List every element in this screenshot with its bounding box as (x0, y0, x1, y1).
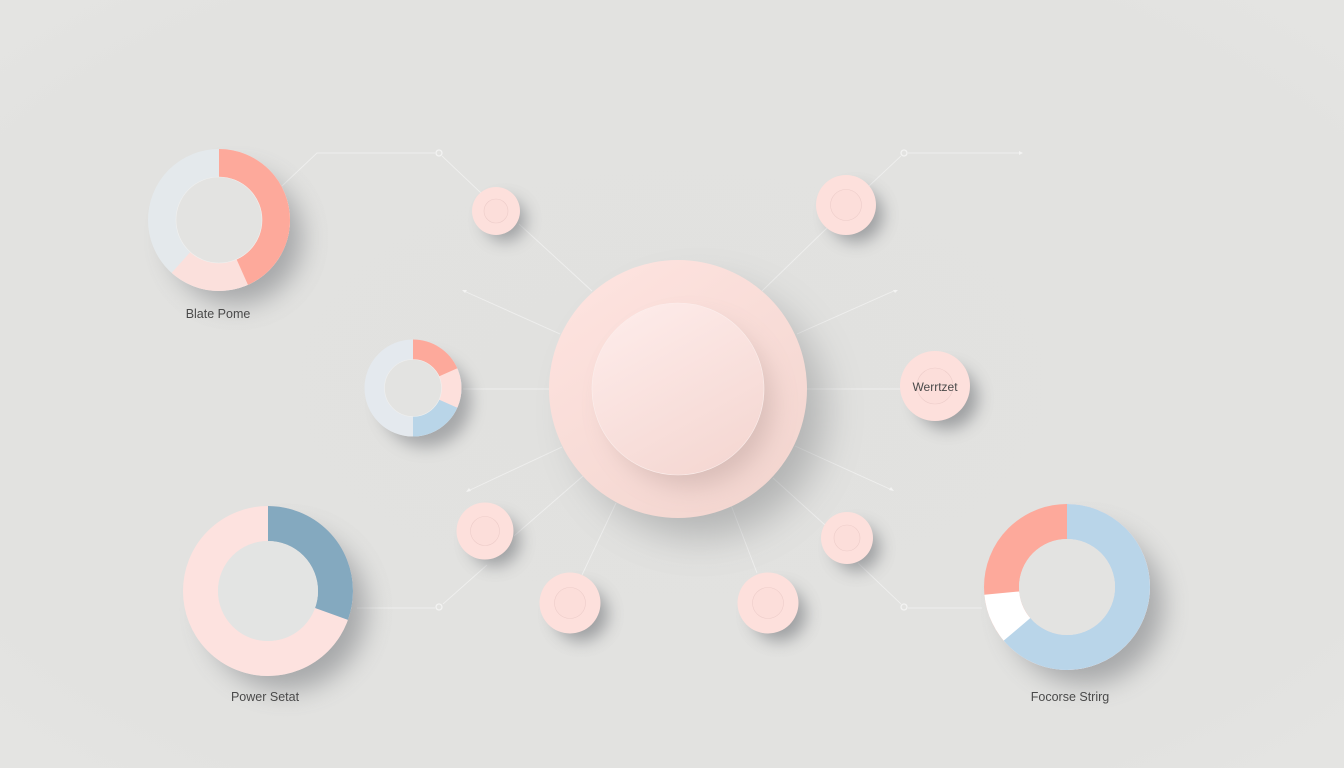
node: upper right (816, 175, 883, 242)
central hub (549, 260, 824, 536)
node: bottom left (540, 572, 608, 641)
node: lower left (456, 502, 520, 566)
connector lines (282, 150, 1023, 610)
donut chart: Blate Pome (148, 149, 302, 304)
donut chart: centre left (364, 340, 471, 447)
label: Blate Pome: Blate Pome (186, 307, 250, 321)
node: upper left (472, 187, 526, 241)
label: Power Setat: Power Setat (231, 690, 300, 704)
node: Werrtzet: Werrtzet (912, 380, 958, 394)
donut chart: Focorse Strirg (984, 504, 1163, 684)
label: Focorse Strirg: Focorse Strirg (1031, 690, 1109, 704)
donut chart: Power Setat (183, 506, 366, 690)
node: Werrtzet (900, 351, 978, 429)
node: bottom right (738, 572, 806, 641)
node: lower right (821, 512, 880, 571)
